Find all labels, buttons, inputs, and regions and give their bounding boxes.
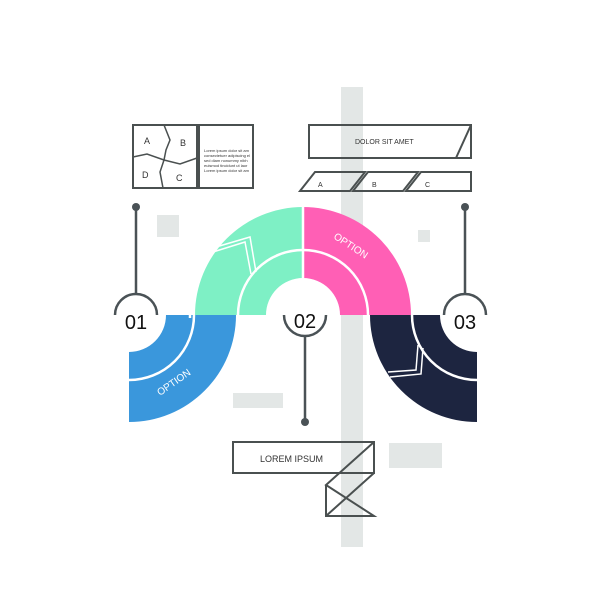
marker 03 xyxy=(444,203,486,334)
panel: ABCD puzzle box xyxy=(133,125,253,188)
panel: ABCD puzzle box: Lorem ipsum dolor sit am xyxy=(204,148,250,153)
marker 02: 02 xyxy=(294,311,316,333)
panel: dolor sit amet banner: DOLOR SIT AMET xyxy=(355,139,414,146)
navy segment xyxy=(370,315,477,422)
white dividers xyxy=(129,205,477,380)
blue segment: OPTION xyxy=(155,367,193,398)
panel: ABCD puzzle box: euismod tincidunt ut laor xyxy=(204,163,248,168)
lorem ipsum ribbon: LOREM IPSUM xyxy=(260,454,323,464)
background bars xyxy=(157,87,442,547)
panel: dolor sit amet banner: A xyxy=(318,182,323,189)
panel: ABCD puzzle box: B xyxy=(180,138,186,148)
marker 02 xyxy=(284,311,326,426)
panel: ABCD puzzle box: consectetuer adipiscing el xyxy=(204,153,250,158)
blue segment xyxy=(129,315,236,422)
panel: dolor sit amet banner: B xyxy=(372,182,377,189)
marker 03: 03 xyxy=(454,312,476,334)
panel: ABCD puzzle box: sed diam nonummy nibh xyxy=(204,158,248,163)
arch: pink segment: OPTION xyxy=(331,231,370,261)
panel: dolor sit amet banner xyxy=(300,125,471,191)
marker 01: 01 xyxy=(125,312,147,334)
panel: dolor sit amet banner: C xyxy=(425,182,430,189)
arch: mint segment xyxy=(195,207,303,315)
arch: pink segment xyxy=(303,207,411,315)
panel: ABCD puzzle box: A xyxy=(144,136,150,146)
panel: ABCD puzzle box: Lorem ipsum dolor sit am xyxy=(204,168,250,173)
marker 01 xyxy=(115,203,157,334)
panel: ABCD puzzle box: C xyxy=(176,173,183,183)
panel: ABCD puzzle box: D xyxy=(142,170,149,180)
lorem ipsum ribbon xyxy=(233,442,374,516)
